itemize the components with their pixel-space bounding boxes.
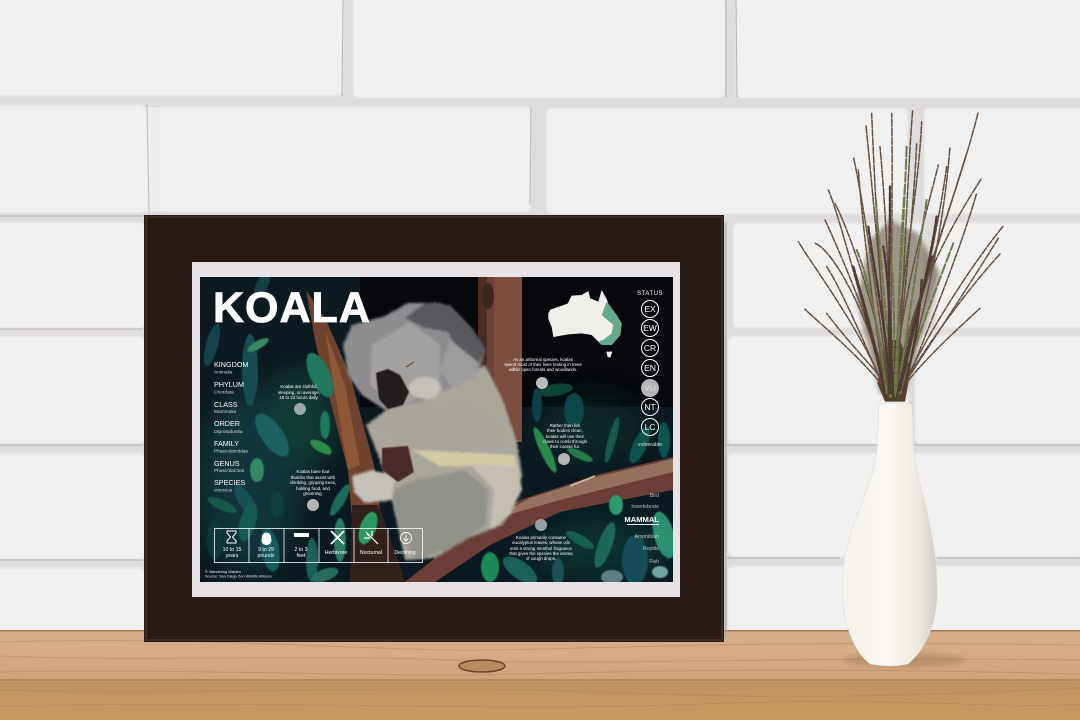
koala eye xyxy=(406,362,414,367)
wooden shelf xyxy=(0,630,1080,720)
status ladder xyxy=(637,290,663,448)
icon: cutlery xyxy=(331,531,344,544)
picture frame xyxy=(144,215,727,642)
fact: grooming: their bodies clean, xyxy=(547,428,583,433)
eucalyptus leaves xyxy=(201,269,680,589)
animal group list: Fish xyxy=(649,559,659,565)
stat labels: pounds xyxy=(257,553,275,559)
body xyxy=(366,365,522,560)
fact: habitat: As an arboreal species, koalas xyxy=(513,357,574,362)
credits: © Wandering Walden xyxy=(205,570,241,574)
taxonomy list: FAMILY xyxy=(214,439,239,448)
fact: grooming: Rather than lick xyxy=(550,423,581,428)
credits: Source: San Diego Zoo Wildlife Alliance xyxy=(205,574,272,578)
fact: thumbs: holding food, and xyxy=(296,486,330,491)
fact: diet: that gives the species the aroma xyxy=(509,551,573,556)
fact: habitat: within open forests and woodlands. xyxy=(509,367,577,372)
stat labels: years xyxy=(226,553,239,559)
taxonomy list: KINGDOM xyxy=(214,360,248,369)
status ladder: STATUS xyxy=(637,290,663,297)
animal group list: MAMMAL xyxy=(624,515,659,524)
credits xyxy=(205,570,272,578)
fact: sleep: sleeping, on average, xyxy=(278,390,320,395)
stat labels: 10 to 15 xyxy=(223,547,241,553)
stat labels xyxy=(223,547,416,559)
title: KOALA xyxy=(213,284,371,332)
white vase xyxy=(842,403,937,666)
taxonomy list: Animalia xyxy=(214,370,233,376)
tree trunks and branch xyxy=(306,277,673,582)
hand xyxy=(352,470,395,503)
animal group list: Amphibian xyxy=(634,534,659,540)
stat labels: Nocturnal xyxy=(360,550,382,556)
koala xyxy=(343,303,522,560)
wood knot xyxy=(459,660,505,672)
stat labels: 2 to 3 xyxy=(295,547,308,553)
fact: diet: of cough drops. xyxy=(526,556,556,561)
white mat xyxy=(192,262,680,597)
fact: sleep: Koalas are slothful, xyxy=(280,384,318,389)
taxonomy list: Phascolarctos xyxy=(214,468,245,474)
dried grass bouquet xyxy=(798,110,1003,402)
taxonomy list: Diprotodontia xyxy=(214,429,243,435)
vase shadow xyxy=(845,653,965,667)
stat labels: Herbivore xyxy=(325,550,347,556)
taxonomy list: ORDER xyxy=(214,419,240,428)
taxonomy list: cinereus xyxy=(214,488,233,494)
fact: thumbs: thumbs that assist with xyxy=(291,475,336,480)
head xyxy=(343,303,486,410)
taxonomy list: PHYLUM xyxy=(214,380,244,389)
animal group list: Invertebrate xyxy=(631,504,659,510)
taxonomy list: Mammalia xyxy=(214,409,236,415)
fact: thumbs: Koalas have four xyxy=(297,469,330,474)
stats strip xyxy=(214,528,422,563)
taxonomy list xyxy=(214,360,248,494)
fact: diet: eucalyptus leaves, whose oils xyxy=(512,540,571,545)
taxonomy list: GENUS xyxy=(214,459,240,468)
taxonomy list: Phascolarctidae xyxy=(214,448,248,454)
animal group list: Reptile xyxy=(643,546,659,552)
fact: thumbs xyxy=(290,469,336,511)
fact: grooming xyxy=(543,423,588,465)
stat labels: feet xyxy=(297,553,306,559)
fact: grooming: claws to comb through xyxy=(543,439,588,444)
fact: diet xyxy=(509,519,573,561)
fact: sleep: 18 to 22 hours daily. xyxy=(279,395,319,400)
fact: diet: Koalas primarily consume xyxy=(516,535,567,540)
stat labels: Declining xyxy=(394,550,416,556)
map of Australia xyxy=(548,290,622,358)
status ladder: CR xyxy=(644,343,656,353)
status ladder: EW xyxy=(643,323,657,333)
fact: habitat: spend most of their lives resting in trees xyxy=(504,362,582,367)
icon: down arrow xyxy=(400,532,412,544)
icon: moon and sun xyxy=(364,531,378,544)
status ladder: LC xyxy=(645,422,655,432)
taxonomy list: SPECIES xyxy=(214,478,245,487)
koala nose xyxy=(376,369,409,409)
fact: diet: emit a strong menthol fragrance xyxy=(510,546,573,551)
koala belly xyxy=(382,446,414,482)
fact: sleep xyxy=(278,384,320,415)
icon: kettlebell xyxy=(262,532,272,545)
fact: thumbs: grooming. xyxy=(303,491,323,496)
poster: koala infographic xyxy=(200,269,680,589)
status ladder: VU xyxy=(644,383,656,393)
fact: grooming: their coarse fur. xyxy=(550,444,580,449)
photo background xyxy=(200,277,673,582)
animal group list: Bird xyxy=(650,493,659,499)
status ladder: NT xyxy=(644,402,656,412)
fact: habitat xyxy=(504,357,582,389)
icon: ruler xyxy=(294,533,309,537)
status ladder: EX xyxy=(644,304,656,314)
fact: thumbs: climbing, gripping trees, xyxy=(290,480,336,485)
animal group list xyxy=(624,493,659,565)
fact: grooming: koalas will use their xyxy=(546,434,585,439)
taxonomy list: CLASS xyxy=(214,400,238,409)
icon: hourglass xyxy=(227,531,236,543)
status ladder: vulnerable xyxy=(638,442,662,448)
stat labels: 9 to 29 xyxy=(258,547,274,553)
taxonomy list: Chordata xyxy=(214,390,234,396)
status ladder: EN xyxy=(644,363,656,373)
